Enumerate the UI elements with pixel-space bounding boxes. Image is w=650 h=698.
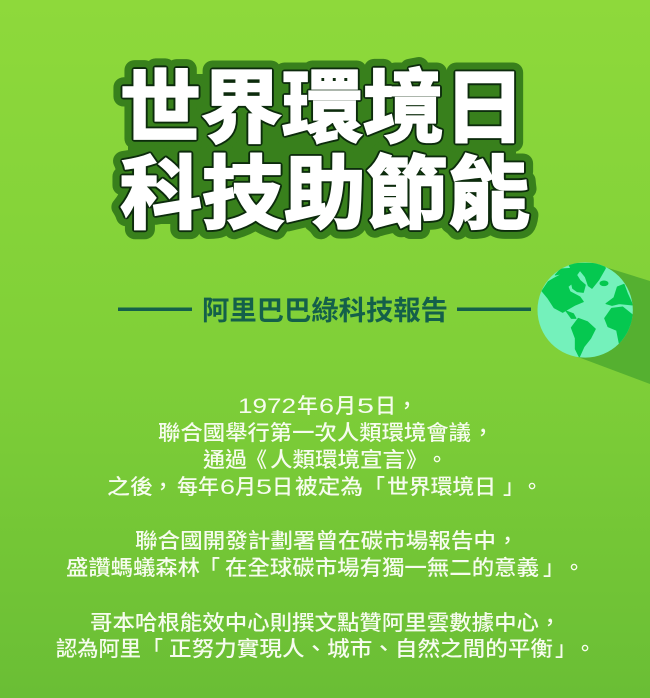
title dark outline xyxy=(120,64,530,239)
paragraph 1: 通過 xyxy=(203,449,247,472)
paragraph 2: ， xyxy=(497,530,518,553)
globe shadow xyxy=(578,267,650,384)
paragraph 1: 月 xyxy=(235,476,256,499)
subtitle text: 阿里巴巴綠科技報告 xyxy=(202,296,448,326)
paragraph 1: 》 xyxy=(406,449,427,472)
title xyxy=(120,64,530,239)
paragraph 3: 」 xyxy=(555,638,576,661)
icon: globe xyxy=(537,262,633,358)
body text xyxy=(56,395,596,661)
paragraph 1: 月 xyxy=(335,395,356,418)
paragraph 3: 正努力實現人、城市、自然之間的平衡 xyxy=(169,638,553,661)
paragraph 1: 5 xyxy=(256,476,272,499)
paragraph 2: 「 xyxy=(199,557,220,580)
paragraph 1: 人類環境宣言 xyxy=(270,449,405,472)
paragraph 1: 日 xyxy=(375,395,396,418)
paragraph 2 xyxy=(66,530,584,580)
title white lettering: 科技助節能 xyxy=(120,150,530,239)
paragraph 3: 哥本哈根能效中心則撰文點贊阿里雲數據中心 xyxy=(90,612,539,635)
subtitle with rules xyxy=(118,296,531,326)
title dark outline: 世界環境日 xyxy=(120,64,525,153)
paragraph 2: 聯合國開發計劃署曾在碳市場報告中 xyxy=(135,530,496,553)
paragraph 3 xyxy=(56,612,596,661)
title white lettering xyxy=(120,64,530,239)
paragraph 1: 年 xyxy=(297,395,318,418)
title halo xyxy=(120,64,530,239)
title halo: 世界環境日 xyxy=(120,64,525,153)
paragraph 3: 。 xyxy=(574,638,596,661)
paragraph 2: 盛讚螞蟻森林 xyxy=(66,557,200,580)
paragraph 1: ， xyxy=(396,395,418,418)
paragraph 2: 。 xyxy=(564,557,584,580)
paragraph 1: 。 xyxy=(522,476,542,499)
paragraph 1: 之後 xyxy=(107,476,153,499)
paragraph 3: 認為阿里 xyxy=(56,638,141,661)
paragraph 1: 聯合國舉行第一次人類環境會議 xyxy=(158,422,471,445)
Central America xyxy=(566,311,576,318)
paragraph 1: 每年 xyxy=(177,476,219,499)
title halo: 科技助節能 xyxy=(120,150,530,239)
paragraph 1: 」 xyxy=(503,476,524,499)
South America xyxy=(571,318,595,357)
paragraph 3: 「 xyxy=(142,638,163,661)
paragraph 3: ， xyxy=(540,612,560,635)
North America xyxy=(542,263,605,312)
paragraph 1: 5 xyxy=(357,395,374,418)
Africa xyxy=(605,307,633,344)
title dark outline: 科技助節能 xyxy=(120,150,530,239)
paragraph 1: 日 xyxy=(272,476,293,499)
paragraph 1: 6 xyxy=(319,395,334,418)
title white lettering: 世界環境日 xyxy=(120,64,525,153)
paragraph 1: 《 xyxy=(246,449,267,472)
paragraph 1: 。 xyxy=(426,449,448,472)
paragraph 1: ， xyxy=(472,422,494,445)
paragraph 1 xyxy=(107,395,542,499)
paragraph 1: 「 xyxy=(364,476,385,499)
paragraph 1: 世界環境日 xyxy=(387,476,496,499)
Europe and Asia xyxy=(606,284,633,305)
paragraph 1: 1972 xyxy=(238,395,296,418)
Greenland islet xyxy=(600,281,608,286)
paragraph 2: 在全球碳市場有獨一無二的意義 xyxy=(225,557,539,580)
paragraph 1: 被定為 xyxy=(295,476,363,499)
paragraph 1: 6 xyxy=(220,476,235,499)
paragraph 2: 」 xyxy=(543,557,564,580)
paragraph 1: ， xyxy=(152,476,174,499)
